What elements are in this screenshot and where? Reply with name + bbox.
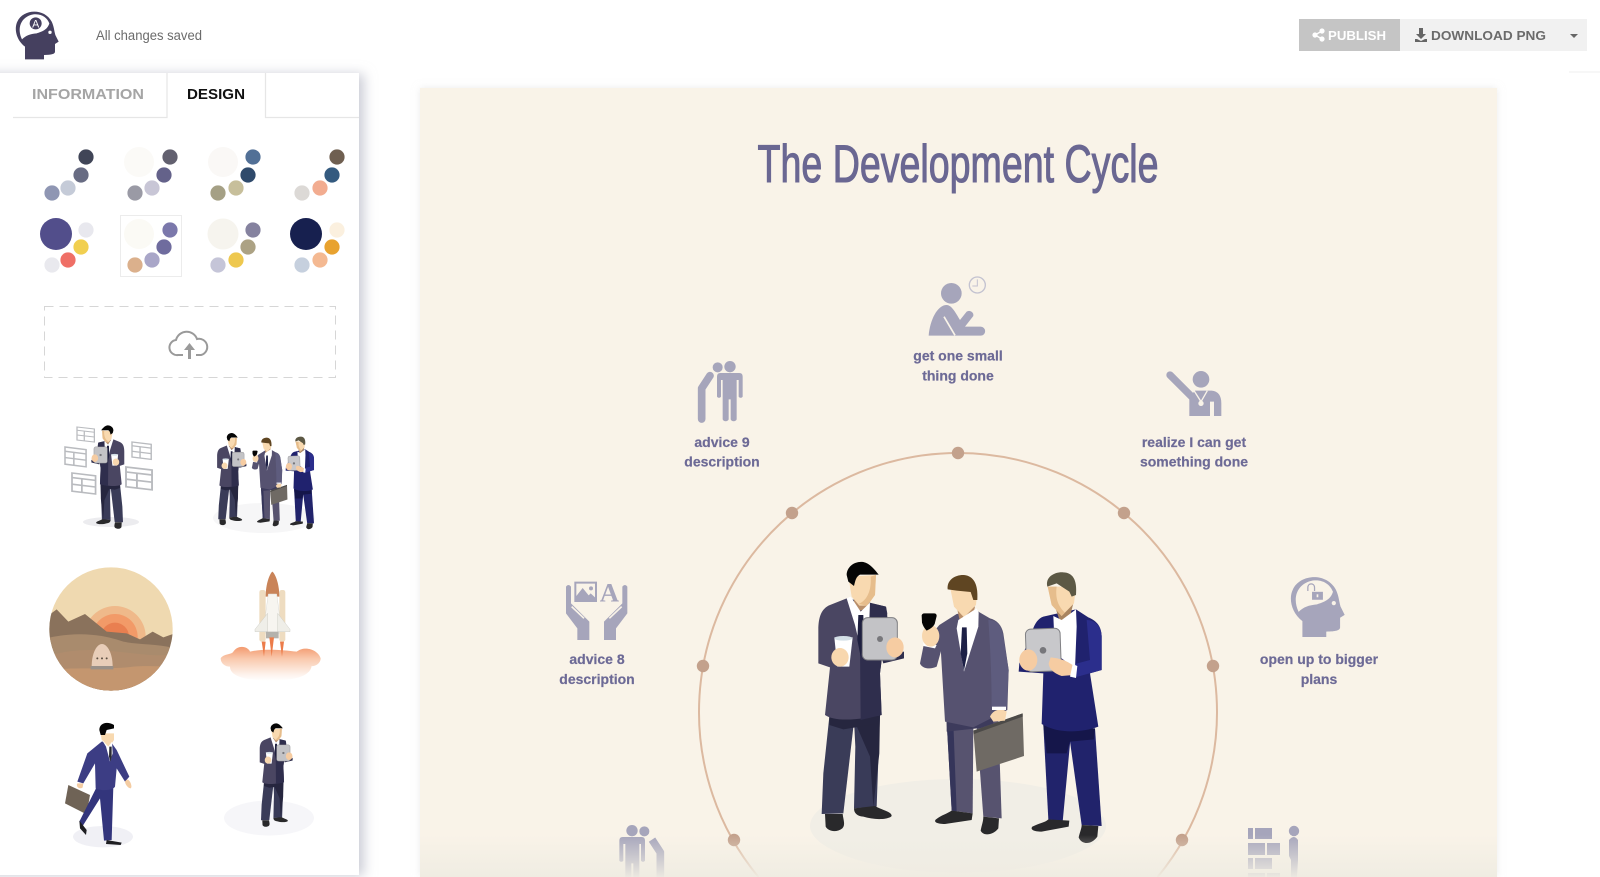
step: open up to bigger plans: plans <box>1301 671 1337 687</box>
download png button <box>1400 19 1587 51</box>
download png button: DOWNLOAD PNG <box>1431 28 1546 43</box>
cycle ring with node dots <box>697 447 1219 877</box>
tabs <box>13 73 359 118</box>
step: realize I can get something done: realize I can get <box>1142 434 1246 450</box>
colour palette swatches <box>40 147 345 276</box>
step: get one small thing done: get one small <box>913 348 1003 364</box>
illustration: man with tablet and floating windows <box>65 425 152 529</box>
step: advice 8 description: advice 8 <box>569 651 625 667</box>
icon: hands holding image and letter: A <box>600 578 620 608</box>
icon: whispering people, cropped at bottom <box>619 825 660 877</box>
icon: head with open padlock <box>1291 577 1345 637</box>
title: The Development Cycle <box>758 135 1158 194</box>
step: realize I can get something done <box>1140 371 1248 470</box>
step: advice 9 description <box>684 361 760 470</box>
illustration: walking businessman with briefcase <box>65 723 133 847</box>
step: get one small thing done: thing done <box>922 368 994 384</box>
logo: head with letter A: A <box>32 18 40 30</box>
step: advice 9 description: advice 9 <box>694 434 750 450</box>
step: open up to bigger plans: open up to bigger <box>1260 651 1379 667</box>
publish button: PUBLISH <box>1328 28 1386 43</box>
step: open up to bigger plans <box>1260 577 1379 687</box>
step: get one small thing done <box>913 277 1003 384</box>
step: advice 8 description: description <box>559 671 635 687</box>
canvas panel: infographic page <box>420 88 1497 877</box>
step: advice 8 description <box>559 578 635 687</box>
logo: head with letter A <box>16 12 59 59</box>
publish button <box>1299 19 1400 51</box>
illustration: space shuttle launch <box>221 572 321 681</box>
panel: design sidebar <box>0 73 359 875</box>
bottom fade of the canvas <box>420 835 1497 877</box>
icon: person beside brick wall, cropped at bottom <box>1248 826 1299 877</box>
step: advice 9 description: description <box>684 454 760 470</box>
step: realize I can get something done: something done <box>1140 454 1248 470</box>
illustration: desert sunset with capsule <box>49 567 173 691</box>
icon: person raising arm with medal <box>1170 371 1221 416</box>
icon: seated person with clock <box>929 277 985 336</box>
illustration: three businessmen with ground shadow <box>810 562 1106 873</box>
tabs: INFORMATION <box>32 86 144 103</box>
illustration: single businessman on ground shadow <box>224 723 314 836</box>
tabs: DESIGN <box>187 86 245 103</box>
save status text: All changes saved <box>96 28 202 43</box>
icon: two people whispering <box>702 361 743 421</box>
upload dropzone with cloud icon <box>44 306 336 378</box>
illustration: three businessmen, small <box>213 433 315 533</box>
